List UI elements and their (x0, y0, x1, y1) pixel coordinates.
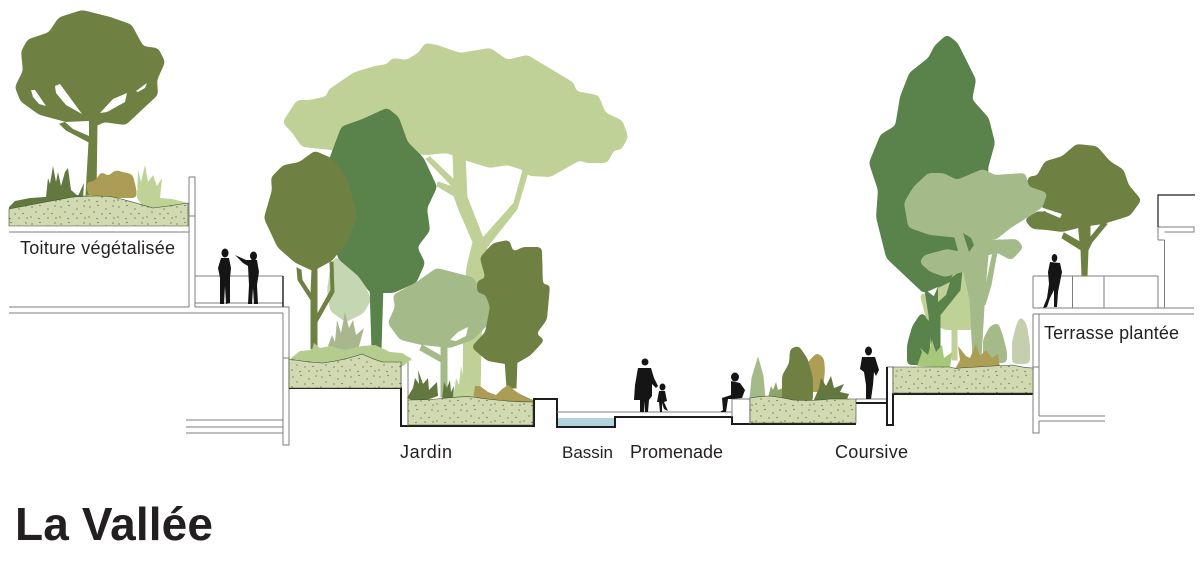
figures (218, 248, 1062, 412)
soil (9, 196, 188, 226)
light grass (137, 165, 188, 210)
dark grass (813, 376, 849, 402)
crown openings (31, 83, 147, 136)
label: toiture: Toiture végétalisée (20, 238, 175, 258)
soil (893, 365, 1033, 393)
trunk (953, 230, 993, 358)
right limb (987, 241, 1021, 258)
crown opening (450, 327, 468, 341)
left limb (922, 251, 966, 275)
basin rim (557, 399, 750, 424)
label: bassin: Bassin (562, 443, 613, 462)
crown (390, 270, 491, 346)
planter one grass (328, 312, 364, 352)
figure: child (657, 384, 668, 412)
balcony railing (195, 275, 283, 277)
crown (906, 171, 1045, 238)
ground cover (9, 195, 90, 212)
gold mounds (473, 385, 533, 406)
tree: medium green tree on the right (906, 171, 1045, 358)
title: La Vallée (15, 498, 213, 550)
central planter plants (750, 348, 856, 423)
small grass (768, 382, 784, 398)
crown (17, 12, 163, 124)
spiky grass (46, 166, 84, 198)
stepped section outline (289, 388, 856, 427)
crown (266, 153, 355, 269)
olive shrub (784, 348, 811, 400)
fork gap (938, 282, 950, 302)
roof wall and upper slab (9, 177, 289, 445)
gold grass (955, 344, 1000, 369)
soil (750, 396, 856, 423)
figure: woman walking (634, 358, 658, 412)
tree: pale background tree (329, 259, 369, 320)
garden planting (407, 366, 533, 425)
limb opening (1040, 207, 1062, 218)
pale conifer (750, 358, 765, 398)
lower left slabs (186, 420, 283, 433)
tree: dark green tree (325, 110, 435, 350)
tree: large pale parasol pine (285, 45, 626, 397)
figure: woman on balcony (235, 252, 259, 304)
upper terrace block (1158, 195, 1195, 227)
crown (1027, 146, 1139, 230)
trunk and branch (60, 122, 97, 195)
figure: seated person (720, 372, 745, 412)
label: jardin: Jardin (400, 442, 452, 462)
basin water (558, 418, 614, 426)
light grass (917, 340, 952, 368)
gold shrub (810, 355, 823, 390)
right shrubs (985, 319, 1028, 362)
tree: rooftop olive tree (17, 12, 163, 195)
tree: medium green tree in garden (390, 270, 491, 397)
label: coursive: Coursive (835, 442, 908, 462)
figure: man on coursive (860, 346, 879, 399)
trunk (370, 285, 383, 350)
label: terrasse: Terrasse plantée (1044, 323, 1179, 343)
rooftop planting (9, 165, 188, 226)
terrace planting (893, 340, 1033, 393)
figure: man on balcony (218, 248, 231, 304)
terrace wall and slabs (1033, 227, 1194, 433)
small dark shrub (909, 315, 928, 363)
balcony post (282, 276, 284, 307)
tree: light green tree behind (922, 252, 986, 360)
gold fern (88, 172, 135, 196)
trunk (952, 330, 957, 360)
crown (325, 110, 435, 291)
crown (474, 242, 548, 362)
crown (285, 45, 626, 175)
coursive (856, 367, 893, 399)
small grass (442, 380, 454, 400)
crown (871, 37, 993, 291)
trunk (426, 155, 528, 397)
planter one ground cover (289, 343, 412, 368)
tree: olive tree on terrace (1027, 146, 1139, 276)
light grass (453, 366, 473, 400)
pale shrub (1014, 319, 1028, 362)
trunk and branch (420, 340, 447, 397)
building section structure (9, 177, 1195, 445)
soil (408, 397, 533, 425)
tree: olive tree on the left (266, 153, 355, 349)
label: promenade: Promenade (630, 442, 723, 462)
trunk and branches (1062, 222, 1107, 276)
tree: tall dark green tree (871, 37, 993, 363)
inner planter wall (401, 361, 408, 426)
trunk (505, 360, 517, 388)
thin branch (985, 252, 997, 305)
dark spiky grass (407, 370, 438, 403)
tree: dark olive lobed tree (474, 242, 548, 388)
dark tree trunk and fork (925, 270, 962, 358)
crown (922, 252, 986, 328)
figure: woman on terrace (1043, 254, 1062, 308)
planter one soil (289, 354, 401, 388)
trunk and branches (297, 262, 334, 349)
medium shrub (985, 325, 1005, 361)
dark patch beside trunk (963, 233, 974, 252)
